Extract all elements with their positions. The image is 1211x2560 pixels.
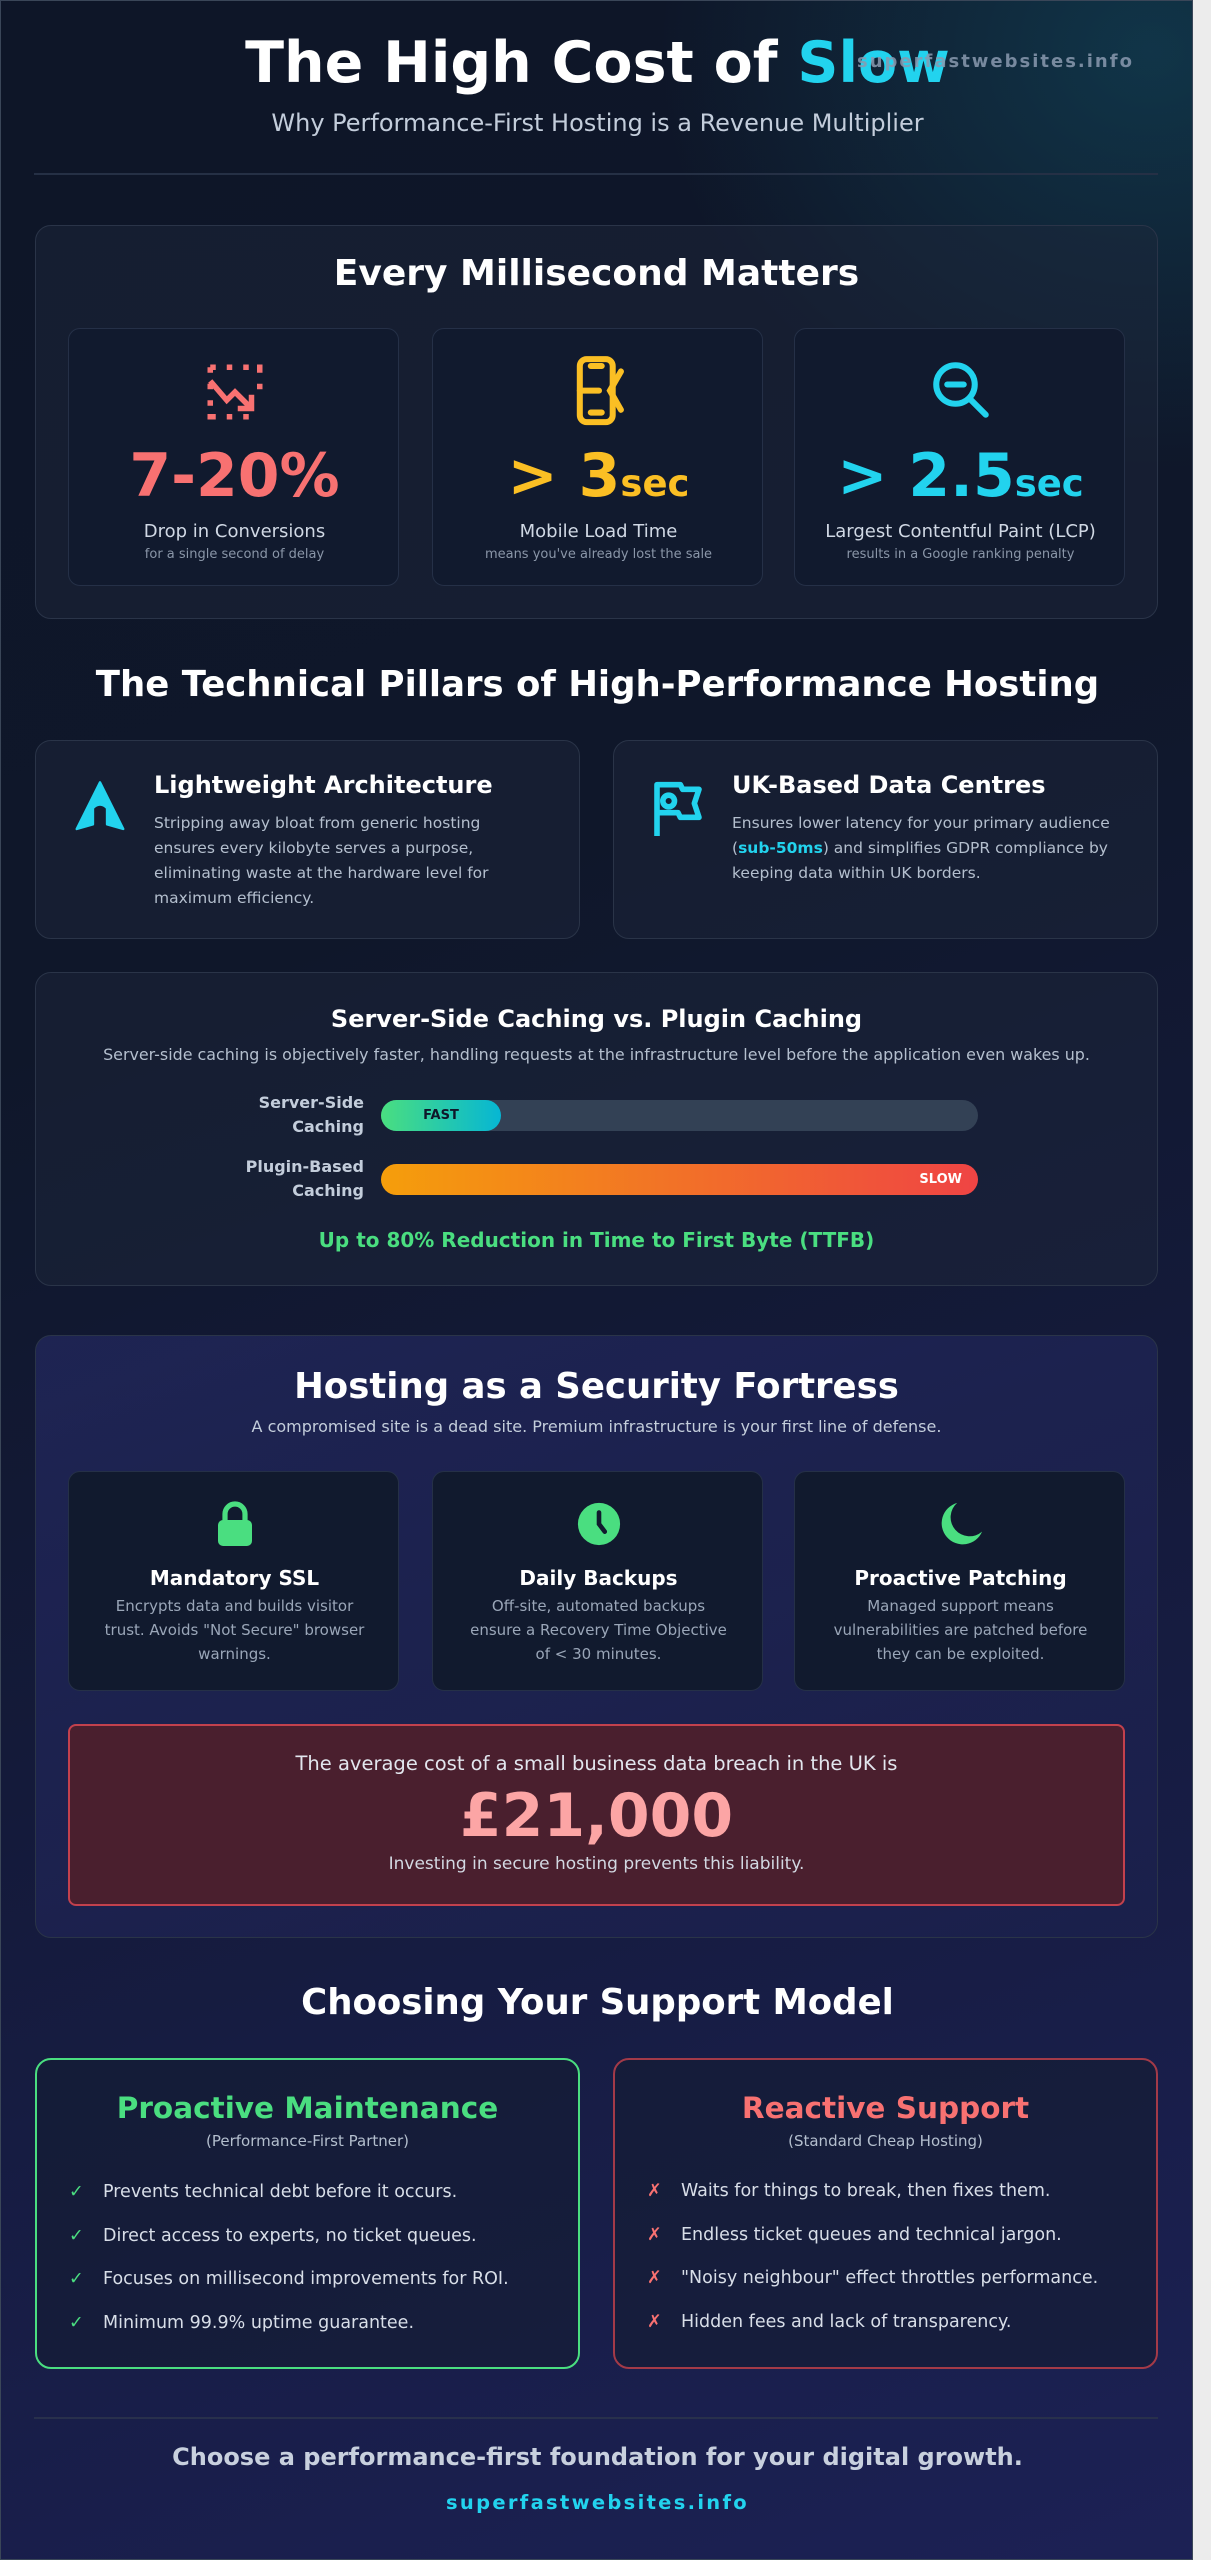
callout: breach cost: £21,000 <box>460 1781 733 1851</box>
icon: phone <box>576 356 624 426</box>
title: Daily Backups <box>519 1566 678 1590</box>
number: 7-20% <box>129 441 340 511</box>
callout: breach cost: Investing in secure hosting prevents this liability. <box>389 1854 804 1874</box>
list: Minimum 99.9% uptime guarantee. <box>103 2312 414 2332</box>
stat card: conversions: for a single second of delay <box>145 547 324 562</box>
text: warnings. <box>198 1645 271 1663</box>
text <box>105 1597 364 1663</box>
panel: reactive support <box>613 2058 1158 2369</box>
label plugin <box>246 1157 364 1200</box>
pillar: lightweight <box>35 740 580 939</box>
icon: flag <box>654 782 702 836</box>
list: "Noisy neighbour" effect throttles performance. <box>681 2268 1098 2288</box>
title: The High Cost of Slow <box>245 30 950 96</box>
footer url: superfastwebsites.info <box>446 2491 749 2514</box>
panel: caching comparison <box>35 972 1158 1286</box>
heading: Server-Side Caching vs. Plugin Caching <box>331 1005 862 1033</box>
text: Encrypts data and builds visitor <box>116 1597 353 1615</box>
pillar: UK data centres <box>613 740 1158 939</box>
title: Mandatory SSL <box>150 1566 319 1590</box>
list: ✗ <box>647 2224 662 2244</box>
label server-side: Server-Side <box>259 1093 364 1112</box>
list: ✓ <box>69 2312 84 2332</box>
list: ✓ <box>69 2269 84 2289</box>
label plugin: Caching <box>292 1181 364 1200</box>
bar slow: SLOW <box>919 1172 962 1187</box>
label: Drop in Conversions <box>144 521 325 542</box>
subtitle: (Standard Cheap Hosting) <box>788 2132 983 2150</box>
stat card: LCP: results in a Google ranking penalty <box>847 547 1074 562</box>
panel: security fortress <box>35 1335 1158 1938</box>
text: keeping data within UK borders. <box>732 864 981 882</box>
text: ensures every kilobyte serves a purpose, <box>154 839 473 857</box>
card: patching <box>794 1471 1125 1691</box>
stat card: conversions <box>68 328 399 586</box>
text: Off-site, automated backups <box>492 1597 705 1615</box>
list: Prevents technical debt before it occurs. <box>103 2182 457 2202</box>
text: eliminating waste at the hardware level for <box>154 864 489 882</box>
number: > 2.5sec <box>837 441 1084 511</box>
title: Proactive Patching <box>854 1566 1067 1590</box>
title: Reactive Support <box>742 2091 1029 2125</box>
list: ✓ <box>69 2182 84 2202</box>
icon: arrow <box>76 781 124 830</box>
panel: every millisecond matters <box>35 225 1158 619</box>
number: > 3sec <box>508 441 689 511</box>
label: Largest Contentful Paint (LCP) <box>825 521 1096 542</box>
label plugin: Plugin-Based <box>246 1157 364 1176</box>
icon: zoom out <box>933 362 989 418</box>
list: Direct access to experts, no ticket queues. <box>103 2226 477 2246</box>
label server-side: Caching <box>292 1117 364 1136</box>
bar fast <box>381 1100 978 1131</box>
text: Stripping away bloat from generic hosting <box>154 814 480 832</box>
icon: chart down <box>208 364 262 420</box>
bar slow <box>381 1164 978 1195</box>
text: they can be exploited. <box>877 1645 1044 1663</box>
list: ✓ <box>69 2226 84 2246</box>
stat card: LCP <box>794 328 1125 586</box>
card: backups <box>432 1471 763 1691</box>
callout: breach cost: The average cost of a small business data breach in the UK is <box>296 1752 897 1775</box>
list <box>647 2181 1098 2332</box>
icon: moon <box>942 1503 982 1544</box>
heading: support model: Choosing Your Support Model <box>301 1982 894 2023</box>
card: SSL <box>68 1471 399 1691</box>
heading: Every Millisecond Matters <box>334 253 859 294</box>
subtitle: Why Performance-First Hosting is a Revenue Multiplier <box>271 109 924 137</box>
text: Ensures lower latency for your primary audience <box>732 814 1110 832</box>
title: Proactive Maintenance <box>117 2091 498 2125</box>
text <box>834 1597 1087 1663</box>
panel: proactive maintenance <box>35 2058 580 2369</box>
description: Server-side caching is objectively faster, handling requests at the infrastructure level before the application even wakes up. <box>103 1045 1090 1064</box>
heading: technical pillars: The Technical Pillars of High-Performance Hosting <box>96 664 1099 705</box>
text: trust. Avoids "Not Secure" browser <box>105 1621 364 1639</box>
list: ✗ <box>647 2312 662 2332</box>
heading: Hosting as a Security Fortress <box>294 1366 899 1407</box>
label server-side <box>259 1093 364 1136</box>
callout ttfb: Up to 80% Reduction in Time to First Byte (TTFB) <box>319 1228 874 1252</box>
stat card: mobile <box>432 328 763 586</box>
list <box>69 2182 509 2332</box>
list: ✗ <box>647 2181 662 2201</box>
text: of < 30 minutes. <box>536 1645 661 1663</box>
text <box>732 814 1110 882</box>
text <box>470 1597 727 1663</box>
text: ensure a Recovery Time Objective <box>470 1621 727 1639</box>
list: Focuses on millisecond improvements for ROI. <box>103 2269 509 2289</box>
title: Lightweight Architecture <box>154 771 493 799</box>
subtitle: (Performance-First Partner) <box>206 2132 409 2150</box>
text: (sub-50ms) and simplifies GDPR compliance by <box>732 839 1108 857</box>
text: Managed support means <box>867 1597 1054 1615</box>
callout: breach cost <box>68 1724 1125 1906</box>
subtitle: A compromised site is a dead site. Premium infrastructure is your first line of defense. <box>252 1417 941 1436</box>
text: maximum efficiency. <box>154 889 314 907</box>
text <box>154 814 489 907</box>
list: ✗ <box>647 2268 662 2288</box>
list: Endless ticket queues and technical jargon. <box>681 2224 1062 2244</box>
bar chart <box>246 1093 978 1200</box>
bar fast: FAST <box>423 1108 459 1123</box>
footer tagline: Choose a performance-first foundation for your digital growth. <box>172 2443 1023 2471</box>
text: vulnerabilities are patched before <box>834 1621 1087 1639</box>
title: UK-Based Data Centres <box>732 771 1046 799</box>
stat card: mobile: means you've already lost the sale <box>485 547 712 562</box>
label: Mobile Load Time <box>520 521 677 542</box>
icon: lock <box>218 1501 252 1546</box>
icon: clock <box>578 1502 620 1546</box>
list: Hidden fees and lack of transparency. <box>681 2312 1011 2332</box>
list: Waits for things to break, then fixes them. <box>681 2181 1050 2201</box>
watermark: superfastwebsites.info <box>857 51 1134 72</box>
